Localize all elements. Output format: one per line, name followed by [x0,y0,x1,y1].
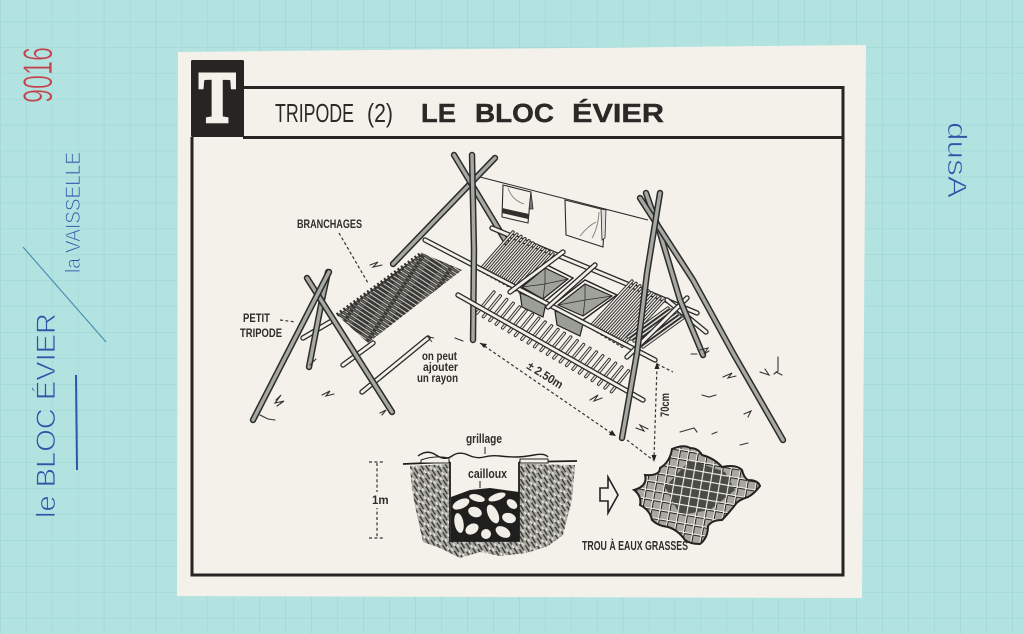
large tripod back legs [393,155,507,264]
cailloux pointer and label [468,467,507,488]
red handwritten reference: 9016 [14,47,61,103]
petit tripode label and leader [240,313,296,340]
T badge [191,57,244,137]
pit cross-section [403,432,577,558]
grass tufts [260,262,782,445]
length dimension: 2.50 m: ± 2.50m [524,359,566,392]
title: TRIPODE [275,98,354,128]
central upright pole [472,155,474,340]
edge stones [421,457,548,463]
title: LE [421,98,456,128]
sink two [553,280,617,336]
frame [192,88,843,575]
blue handwritten note: le bloc evier: le BLOC ÉVIER [31,313,61,518]
stones [451,488,519,541]
branchages label and leader [297,219,368,283]
trou a eaux grasses label: TROU À EAUX GRASSES [582,538,688,553]
small tripod poles [253,272,392,420]
petit tripode label and leader: PETIT [243,313,270,325]
small tripod rails [303,322,428,392]
on peut ajouter un rayon note [417,337,458,385]
pit walls and ground line [403,461,577,541]
blue handwritten note: la vaisselle: la VAISSELLE [62,152,85,273]
diagonal pen stroke [23,247,106,342]
blue handwritten signature: dusA [942,122,972,198]
depth dimension: 1 m: 1m [372,495,389,507]
height dimension: 70 cm [652,362,673,462]
main illustration: bloc evier structure [253,155,783,445]
clothes line [480,177,648,220]
cailloux pointer and label: cailloux [468,467,507,481]
title [275,98,664,128]
branchages label and leader: BRANCHAGES [297,219,362,231]
right tripod poles [622,193,783,440]
soil [410,464,575,558]
arrow: from section to top view [600,477,618,513]
cloth [565,200,606,247]
on peut ajouter un rayon note: un rayon [417,373,458,385]
towel [502,185,533,223]
branch mat [337,253,462,343]
depth dimension: 1 m [369,462,389,538]
rack slats [480,232,683,347]
front slats [477,292,628,392]
sink one [517,264,573,317]
height dimension: 70 cm: 70cm [658,393,672,417]
on peut ajouter un rayon note: on peut [422,351,457,363]
back rail [492,228,706,332]
length dimension: 2.50 m [480,343,653,460]
front rail [458,295,643,400]
middle rail and cross bars [425,240,687,360]
blue underline [76,375,77,470]
title: (2) [367,98,393,128]
grillage pointer and label [466,432,502,454]
top view of covered pit [634,446,760,544]
petit tripode label and leader: TRIPODE [240,328,282,340]
T badge: T [199,57,236,137]
paper clipping [177,45,866,598]
grillage pointer and label: grillage [466,432,502,446]
on peut ajouter un rayon note: ajouter [423,362,458,374]
title: ÉVIER [572,98,664,128]
wire mesh wave [418,452,548,458]
title: BLOC [475,98,554,128]
